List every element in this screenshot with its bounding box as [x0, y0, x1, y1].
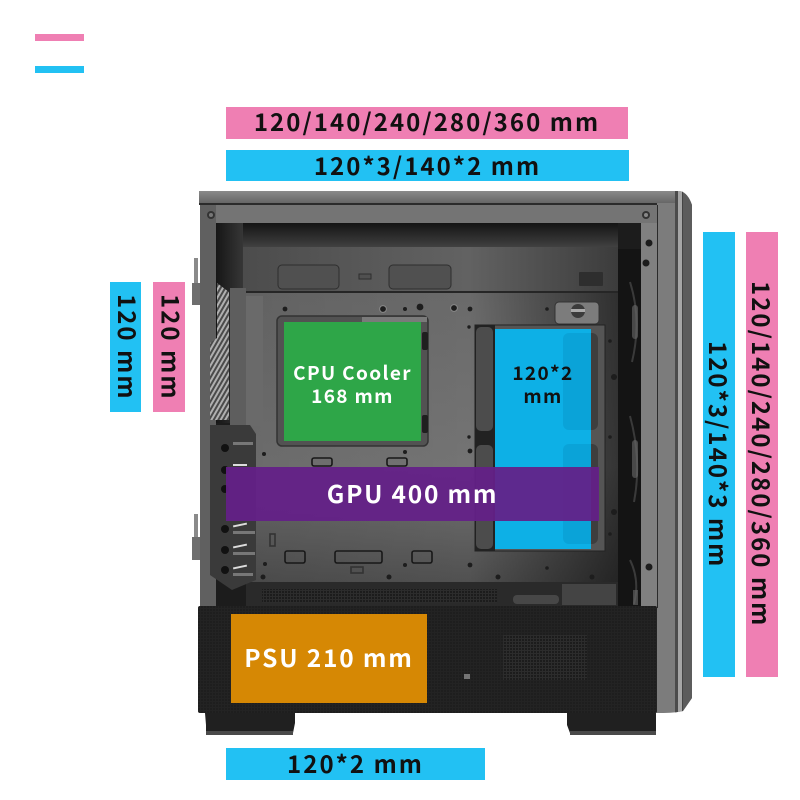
CPU cooler clearance box: CPU Cooler	[293, 358, 412, 386]
outer side panel	[656, 191, 692, 713]
tray holes	[260, 304, 617, 580]
CPU cooler clearance box	[284, 322, 421, 441]
PCI slots	[210, 425, 256, 590]
motherboard tray	[246, 293, 618, 583]
tray floor	[246, 582, 618, 607]
top fan size bar	[226, 150, 629, 181]
top fan size bar: 120*3/140*2 mm	[314, 146, 541, 182]
rear radiator size bar: 120 mm	[154, 294, 190, 400]
GPU clearance bar: GPU 400 mm	[327, 476, 498, 511]
legend: blue swatch	[35, 66, 84, 73]
right fans	[618, 249, 641, 607]
front fan size bar: 120*3/140*3 mm	[702, 341, 737, 568]
right frame	[641, 223, 657, 608]
CPU window	[277, 316, 428, 446]
upper cutouts	[278, 265, 451, 289]
hinges	[192, 258, 200, 560]
PSU clearance box: PSU 210 mm	[244, 640, 414, 675]
PSU clearance box	[231, 614, 427, 703]
rear cutout	[475, 325, 605, 551]
thumbscrew plate	[555, 302, 599, 324]
front fan size bar	[703, 232, 735, 677]
GPU clearance bar	[226, 467, 599, 521]
interior	[216, 223, 641, 607]
top radiator size bar: 120/140/240/280/360 mm	[254, 103, 600, 138]
front radiator size bar: 120/140/240/280/360 mm	[745, 281, 780, 628]
rear radiator clearance box	[495, 329, 591, 549]
left drive column	[230, 288, 246, 433]
bottom fan size bar	[226, 748, 485, 780]
PSU shroud	[198, 606, 657, 713]
rear fan size bar: 120 mm	[111, 294, 146, 400]
PC case photo illustration	[192, 191, 692, 735]
left frame	[200, 205, 216, 607]
bottom fan size bar: 120*2 mm	[287, 745, 424, 780]
CPU cooler clearance box: 168 mm	[311, 382, 394, 408]
rear radiator clearance box: mm	[523, 382, 563, 409]
feet	[205, 713, 295, 733]
cable slots	[270, 458, 432, 573]
top panel	[199, 191, 675, 203]
side mesh	[210, 283, 229, 420]
top interior	[243, 223, 618, 249]
legend: pink swatch	[35, 34, 84, 41]
rear radiator clearance box: 120*2	[512, 359, 574, 386]
